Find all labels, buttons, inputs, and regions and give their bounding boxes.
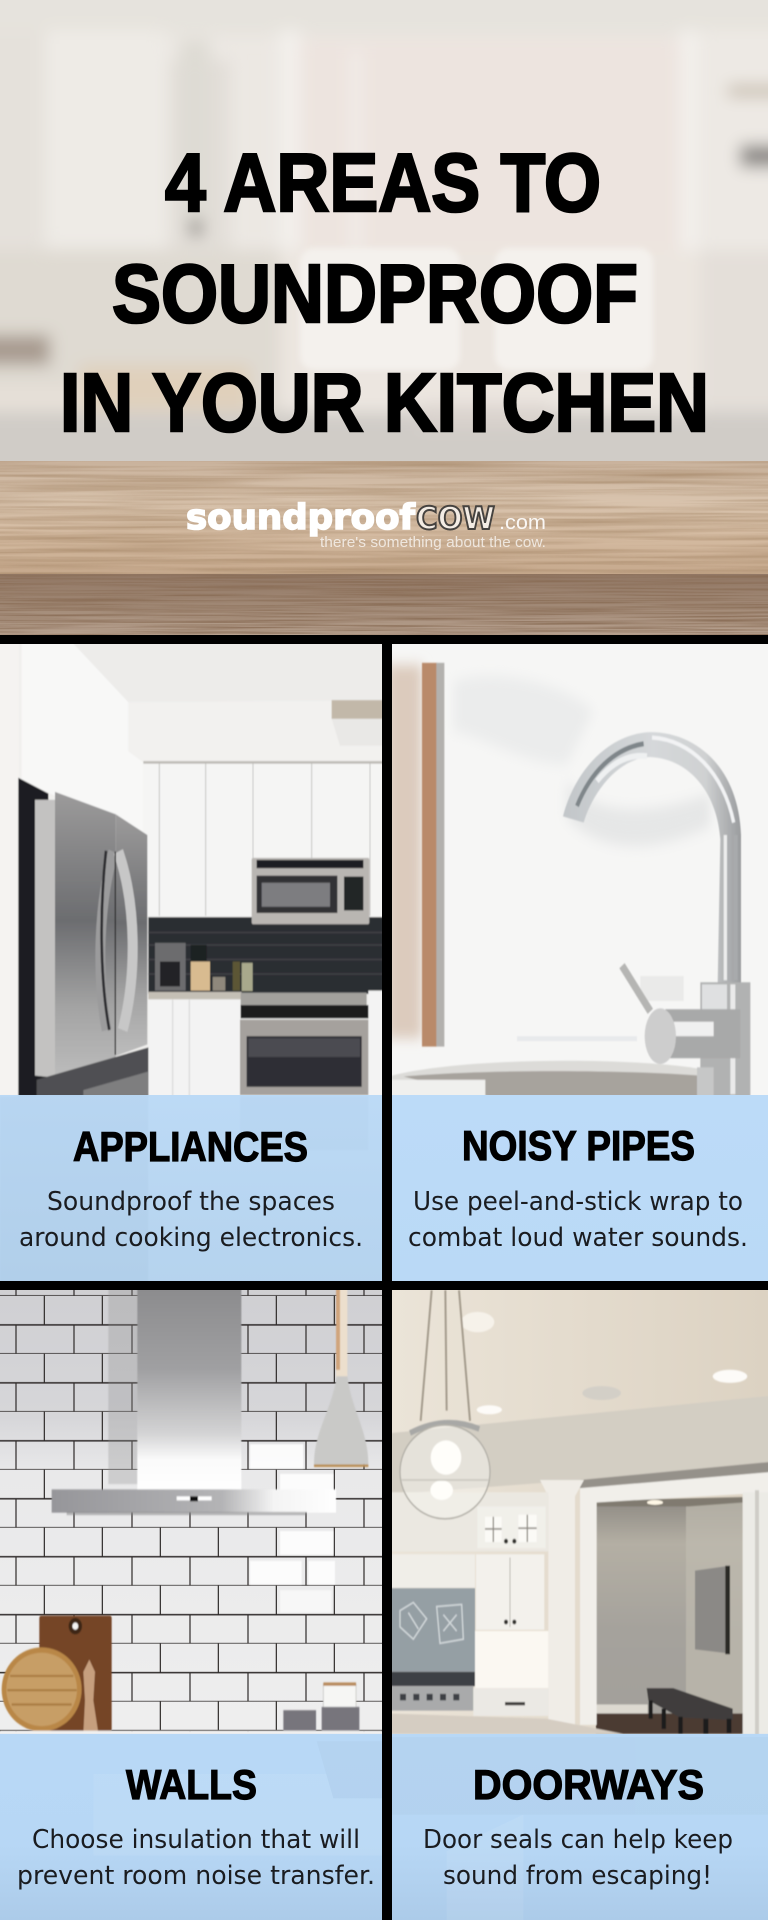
door trim — [580, 1472, 768, 1725]
refrigerator — [18, 778, 48, 1096]
bench — [647, 1688, 733, 1720]
panel: walls — [0, 1280, 382, 1920]
description: doorways: sound from escaping! — [443, 1861, 712, 1891]
description: noisy pipes — [408, 1187, 748, 1253]
panel: doorways — [388, 1280, 768, 1920]
title: SOUNDPROOF — [112, 247, 638, 340]
pendant lamp — [336, 1288, 347, 1378]
photo: stainless kitchen appliances — [0, 644, 382, 1281]
heading: noisy pipes: NOISY PIPES — [462, 1122, 695, 1169]
panel: noisy pipes — [387, 640, 768, 1287]
heading: doorways: DOORWAYS — [473, 1761, 704, 1808]
description: appliances: around cooking electronics. — [19, 1223, 363, 1253]
description: appliances — [19, 1187, 363, 1253]
stove — [241, 993, 367, 1006]
caption background — [0, 1095, 382, 1281]
panel: hero header — [0, 0, 768, 635]
panel: appliances — [0, 640, 387, 1287]
description: walls: Choose insulation that will — [32, 1825, 360, 1855]
description: doorways — [423, 1825, 733, 1891]
cutting boards and pepper mill — [39, 1616, 112, 1732]
logo: soundproofcow.com: .com — [499, 512, 546, 534]
caption background — [388, 1734, 768, 1920]
logo: soundproofcow.com: there's something about the cow. — [320, 534, 546, 551]
photo: chrome faucet — [392, 644, 768, 1095]
glass pendant light — [421, 1290, 470, 1421]
caption background — [392, 1095, 768, 1281]
heading: walls: WALLS — [126, 1761, 257, 1808]
canisters — [323, 1684, 356, 1708]
upper cabinets — [143, 763, 387, 917]
column and cabinets — [540, 1480, 584, 1733]
faucet handle and body — [622, 966, 650, 1011]
faucet spout — [563, 732, 741, 984]
lower cabinets — [148, 1000, 240, 1099]
heading: appliances: APPLIANCES — [73, 1123, 308, 1170]
range — [388, 1672, 475, 1686]
doorway interior — [596, 1500, 743, 1717]
artwork — [695, 1566, 729, 1653]
logo: soundproofcow.com: COW — [416, 501, 495, 537]
backsplash — [388, 1588, 475, 1672]
description: walls: prevent room noise transfer. — [17, 1861, 375, 1891]
counter items — [155, 943, 186, 991]
range hood — [137, 1288, 241, 1490]
wall band — [392, 1396, 768, 1494]
photo: kitchen doorway — [392, 1290, 768, 1920]
logo: soundproofcow.com — [186, 498, 546, 551]
title: 4 AREAS TO — [165, 136, 601, 229]
countertop — [0, 1731, 382, 1743]
title — [60, 136, 709, 449]
backsplash — [148, 917, 387, 994]
recessed lights — [461, 1312, 494, 1332]
granite countertop — [388, 1713, 623, 1734]
description: noisy pipes: combat loud water sounds. — [408, 1223, 748, 1253]
ceiling — [70, 640, 387, 762]
logo: soundproofcow.com: soundproof — [186, 498, 416, 538]
wooden table top — [0, 461, 768, 635]
marble and blurred window — [387, 665, 710, 1038]
microwave — [252, 858, 369, 924]
caption background — [0, 1734, 382, 1920]
description: doorways: Door seals can help keep — [423, 1825, 733, 1855]
photo: white subway tile wall — [0, 1290, 382, 1920]
blurred jars — [300, 248, 653, 370]
blurred kitchen background photo — [0, 0, 768, 461]
sink — [392, 1061, 704, 1096]
description: appliances: Soundproof the spaces — [47, 1187, 335, 1217]
faint continuation under the caption — [0, 1096, 148, 1283]
description: walls — [17, 1825, 375, 1891]
description: noisy pipes: Use peel-and-stick wrap to — [413, 1187, 743, 1217]
ceiling light — [332, 700, 387, 719]
